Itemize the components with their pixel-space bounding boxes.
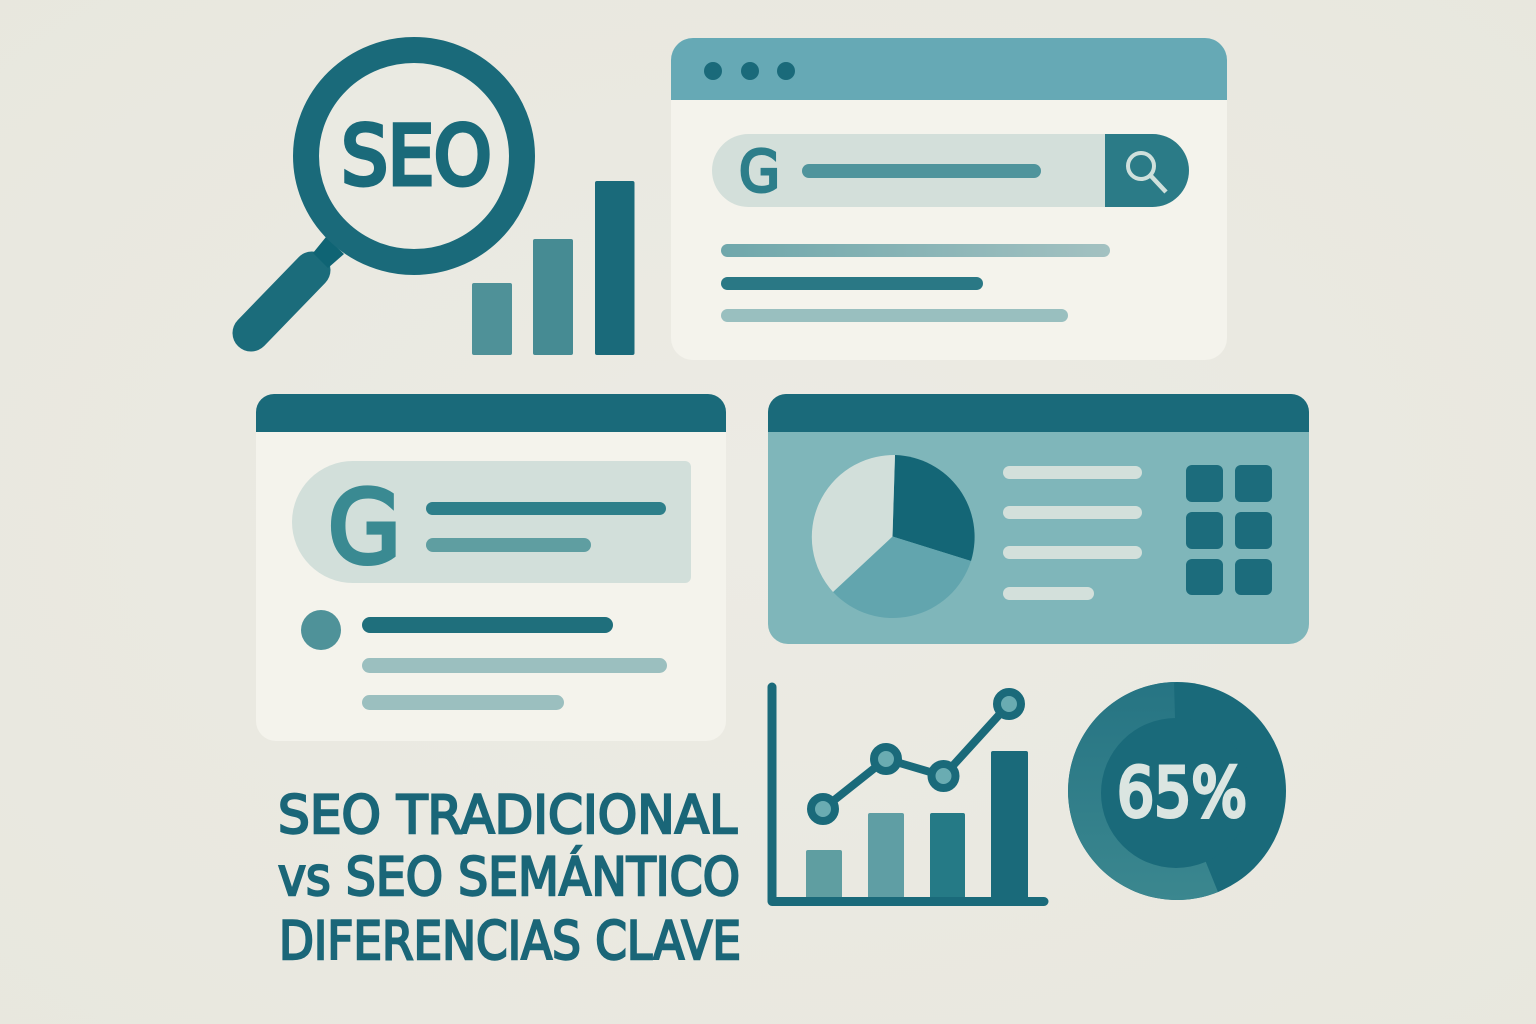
magnifier lens ring xyxy=(306,50,522,262)
panel: analytics dashboard xyxy=(768,394,1309,644)
card lines xyxy=(426,502,666,552)
browser title bar xyxy=(671,38,1227,100)
title: DIFERENCIAS CLAVE xyxy=(279,911,741,972)
search button xyxy=(1105,134,1189,207)
donut ring segment xyxy=(1068,682,1218,900)
dashboard text lines xyxy=(1003,466,1142,600)
magnifier neck xyxy=(313,237,344,268)
search query line xyxy=(802,164,1041,178)
donut base xyxy=(1068,682,1286,900)
result lines xyxy=(362,617,667,710)
result lines xyxy=(721,244,1110,322)
dashboard title bar xyxy=(768,394,1309,432)
icon: G logo large: G xyxy=(328,469,401,586)
donut chart: 65% xyxy=(1068,682,1286,900)
search card xyxy=(292,461,691,583)
chart axes xyxy=(772,687,1044,902)
icon: search glass xyxy=(1128,153,1166,192)
search bar xyxy=(712,134,1189,207)
title: SEO TRADICIONAL xyxy=(278,785,737,846)
combo chart: bars and trend line xyxy=(772,687,1044,902)
trend points xyxy=(811,692,1021,821)
panel: search results window xyxy=(256,394,726,741)
chart bars xyxy=(806,751,1028,900)
icon: SEO magnifying glass xyxy=(251,50,522,333)
icon: G logo: G xyxy=(739,139,780,205)
window body xyxy=(256,394,726,741)
browser body xyxy=(671,38,1227,360)
donut centre xyxy=(1101,718,1251,868)
magnifier handle xyxy=(251,270,312,333)
title xyxy=(278,785,741,972)
percentage: 65% xyxy=(1117,754,1247,833)
window dots xyxy=(704,62,795,80)
trend line xyxy=(823,704,1009,809)
panel: browser search window xyxy=(671,38,1227,360)
SEO label: SEO xyxy=(342,110,492,204)
bar chart: rising bars xyxy=(472,181,634,355)
result bullet xyxy=(301,610,341,650)
window title bar xyxy=(256,394,726,432)
dashboard body xyxy=(768,394,1309,644)
tile grid xyxy=(1186,465,1272,595)
title: vs SEO SEMÁNTICO xyxy=(278,845,740,908)
pie chart xyxy=(812,455,975,618)
